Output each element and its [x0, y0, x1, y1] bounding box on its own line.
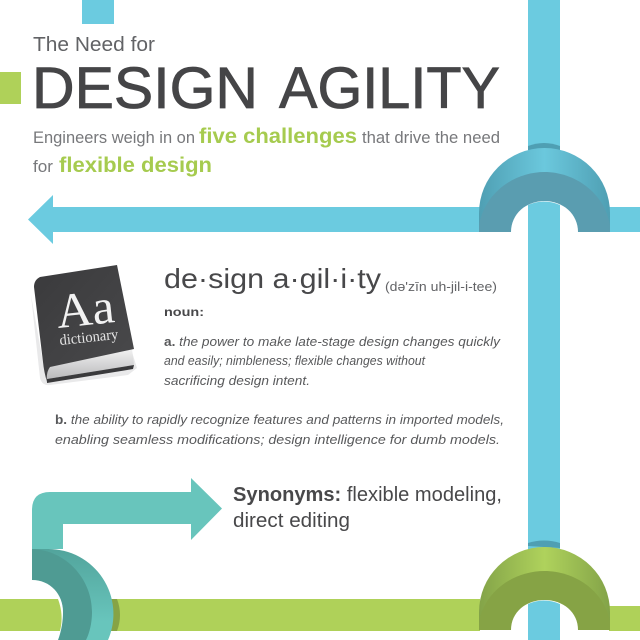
vertical blue pipe: [528, 0, 560, 640]
title: design agility: [32, 56, 500, 121]
top blue tab: [82, 0, 114, 24]
heading: the need for: The Need for: [33, 34, 155, 56]
horizontal blue arrow: [28, 195, 640, 244]
green side tab: [0, 72, 21, 104]
definition b: enabling seamless modifications; design intelligence for dumb models.: [55, 432, 500, 447]
intro text: five challenges: [199, 125, 357, 148]
definition a: and easily; nimbleness; flexible changes without: [164, 353, 426, 368]
definition a: a. the power to make late-stage design changes quickly: [164, 334, 502, 349]
definition b: [55, 412, 504, 447]
bottom green pipe: [0, 599, 640, 631]
icon: dictionary book: [31, 265, 137, 385]
icon: dictionary book: Aa: [53, 278, 117, 339]
green arch connector: [479, 540, 610, 630]
part of speech: noun:: [164, 305, 204, 319]
definition b: b. the ability to rapidly recognize features and patterns in imported models,: [55, 412, 504, 427]
headword: de·sign a·gil·i·ty: [164, 263, 381, 294]
title: design agility: DESIGN: [32, 56, 258, 121]
definition a: sacrificing design intent.: [164, 373, 310, 388]
intro text: Engineers weigh in on: [33, 128, 195, 147]
intro text: [33, 125, 500, 177]
definition a: [164, 334, 502, 388]
intro text: for: [33, 157, 53, 176]
title: design agility: AGILITY: [279, 56, 500, 121]
teal bent arrow: [32, 478, 222, 549]
synonyms: [233, 484, 502, 532]
icon: dictionary book: dictionary: [59, 327, 120, 349]
intro text: that drive the need: [362, 128, 500, 147]
pronunciation: (də'zīn uh-jil-i-tee): [385, 279, 497, 294]
teal arch connector: [0, 549, 120, 640]
blue arch connector: [479, 143, 610, 232]
synonyms: Synonyms: flexible modeling,: [233, 484, 502, 506]
intro text: flexible design: [59, 154, 212, 177]
synonyms: direct editing: [233, 510, 350, 532]
